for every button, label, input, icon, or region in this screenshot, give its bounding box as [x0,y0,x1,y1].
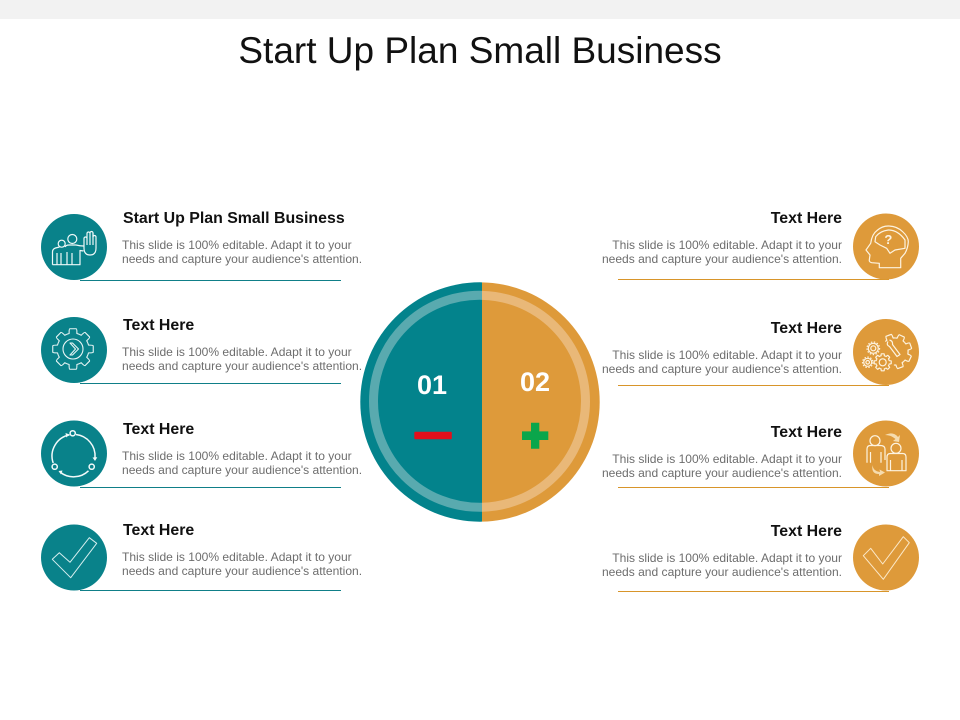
body text: This slide is 100% editable. Adapt it to your [612,452,842,466]
body text: needs and capture your audience's attention. [122,564,362,578]
body text [122,449,362,477]
heading: Start Up Plan Small Business [123,210,345,227]
icon: check mark [853,524,919,590]
body text: This slide is 100% editable. Adapt it to your [122,238,352,252]
graphics layer [41,214,919,592]
right block 2 [602,320,842,376]
icon: minus [414,432,452,439]
heading: Text Here [771,210,842,227]
icon: gear with chevron [41,317,107,383]
body text [602,348,842,376]
heading: Text Here [771,523,842,540]
left block 1 [122,210,362,266]
right rules [618,280,889,592]
icon: check mark [41,524,107,590]
body text [122,550,362,578]
body text: This slide is 100% editable. Adapt it to your [612,238,842,252]
right block 1 [602,210,842,266]
title: Start Up Plan Small Business [238,30,722,71]
icon: circular arrows [41,420,107,486]
icon: two people exchanging [853,420,919,486]
body text [122,345,362,373]
body text: needs and capture your audience's attention. [602,362,842,376]
center circle [360,282,600,522]
right block 3 [602,424,842,480]
body text: This slide is 100% editable. Adapt it to your [122,550,352,564]
left block 4 [122,522,362,578]
heading: Text Here [123,522,194,539]
left rules [80,280,341,590]
left block 2 [122,317,362,373]
icon: gears and wrench [853,319,919,385]
heading: Text Here [123,421,194,438]
body text: This slide is 100% editable. Adapt it to your [122,345,352,359]
body text [602,238,842,266]
icon: people with raised hand [41,214,107,280]
heading: Text Here [771,424,842,441]
icon: head with question mark [853,214,919,280]
body text: needs and capture your audience's attention. [602,252,842,266]
body text [602,551,842,579]
body text: This slide is 100% editable. Adapt it to your [122,449,352,463]
body text: needs and capture your audience's attention. [602,466,842,480]
body text: needs and capture your audience's attention. [602,565,842,579]
body text: This slide is 100% editable. Adapt it to your [612,348,842,362]
number 01: 01 [417,370,447,400]
heading: Text Here [123,317,194,334]
right block 4 [602,523,842,579]
body text: needs and capture your audience's attention. [122,252,362,266]
number 02: 02 [520,367,550,397]
heading: Text Here [771,320,842,337]
top band [0,0,960,19]
body text: needs and capture your audience's attention. [122,463,362,477]
body text: This slide is 100% editable. Adapt it to your [612,551,842,565]
body text: needs and capture your audience's attention. [122,359,362,373]
icon: head with question mark: ? [884,232,892,247]
body text [602,452,842,480]
left block 3 [122,421,362,477]
body text [122,238,362,266]
icon: plus [522,423,548,449]
